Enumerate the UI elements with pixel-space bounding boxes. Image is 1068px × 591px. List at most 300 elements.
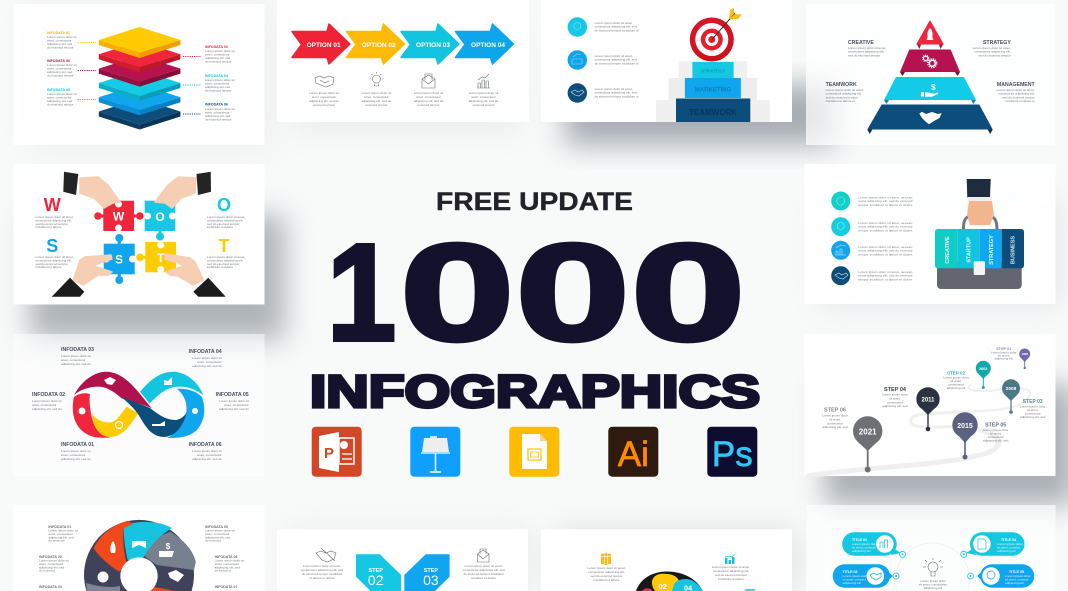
wheel labels: do eiusmod — [48, 538, 65, 542]
option captions: eiusmod tempor — [313, 103, 335, 107]
wheel labels: INFODATA 01 — [48, 525, 71, 529]
step labels: Lorem ipsum dolor — [983, 428, 1009, 432]
step labels — [822, 347, 1046, 442]
layer labels: INFODATA 06 — [205, 102, 228, 106]
wheel labels: Lorem ipsum dolor sit — [48, 528, 78, 532]
bubble title 05: TITLE 05 — [1009, 570, 1024, 574]
icon: Google Slides — [509, 427, 559, 477]
step labels: STEP 04 — [884, 387, 907, 393]
SWOT captions: Lorem ipsum dolor sit amet, — [207, 215, 245, 219]
puzzle piece S — [102, 234, 136, 284]
briefcase list text: tempor incididunt ut labore et dolore — [858, 203, 913, 207]
SWOT captions: sed do eiusmod tempor — [36, 222, 68, 226]
wheel labels: Lorem ipsum dolor sit — [205, 528, 235, 532]
icon circle: handshake — [831, 266, 850, 285]
bubble title 04: TITLE 04 — [1001, 538, 1016, 542]
layer labels: amet, consectetur — [205, 52, 230, 56]
step labels: Lorem ipsum dolor — [1020, 404, 1046, 408]
bubble title 04: adipiscing elit — [997, 549, 1016, 553]
layer labels: Lorem ipsum dolor sit — [205, 78, 235, 82]
arrow: option 04: OPTION 04 — [471, 42, 505, 49]
stairs: TEAMWORK — [689, 108, 737, 117]
icon: chart circle — [568, 50, 587, 70]
SWOT captions: sed do eiusmod tempor — [207, 222, 239, 226]
step labels: sit amet, — [889, 396, 901, 400]
connector dots — [893, 551, 974, 579]
pyramid labels: incididunt ut labore et — [1005, 99, 1035, 103]
bubble title 01: sit amet, consect — [852, 546, 875, 550]
step labels: Lorem ipsum dolor — [943, 376, 969, 380]
wheel labels: amet, consectetur — [205, 532, 230, 536]
arrow: option 04 — [456, 24, 514, 64]
stairs — [656, 61, 770, 122]
pyramid labels: STRATEGY — [983, 40, 1011, 46]
pyramid labels: Lorem ipsum dolor sit amet, — [826, 88, 864, 92]
brain captions: Lorem ipsum dolor sit amet, — [712, 565, 750, 569]
panel: SWOT puzzle — [14, 164, 264, 304]
briefcase list text: Lorem ipsum dolor sit amet, aenean — [858, 221, 913, 225]
wheel labels: amet, consectetur — [215, 562, 239, 566]
layer labels — [47, 31, 235, 122]
infinity labels: INFODATA 03 — [61, 347, 94, 353]
list text: consectetur adipiscing elit, sed — [595, 58, 637, 62]
wheel labels: adipiscing elit, sed — [48, 536, 74, 540]
pyramid labels: consectetur adipiscing elit, — [826, 92, 862, 96]
option captions: adipiscing elit, sed do — [362, 99, 391, 103]
briefcase illustration: CREATIVE — [945, 236, 951, 264]
SWOT captions: consectetur adipiscing elit, — [36, 218, 72, 222]
wheel labels: do eiusmod — [39, 568, 55, 572]
briefcase list text — [858, 196, 913, 281]
icon: lightbulb circle — [568, 17, 587, 37]
step labels: adipiscing elit, sed — [1020, 415, 1046, 419]
SWOT captions — [36, 215, 245, 269]
briefcase list text: netus adipiscing elit, sed do eiusmod — [858, 249, 913, 253]
wheel labels: INFODATA 05 — [205, 525, 228, 529]
step captions — [301, 564, 505, 580]
pyramid labels: MANAGEMENT — [997, 82, 1036, 88]
icon: Photoshop: Ps — [712, 435, 753, 474]
infinity labels: Lorem ipsum dolor sit — [61, 354, 91, 358]
list text — [595, 21, 639, 98]
briefcase illustration — [935, 179, 1024, 289]
infinity labels: adipiscing elit, sed do — [32, 407, 62, 411]
step labels: consectetur — [887, 400, 903, 404]
list text: consectetur adipiscing elit, sed — [595, 25, 637, 29]
infinity labels: amet, consectetur — [61, 453, 86, 457]
briefcase list text: tempor incididunt ut labore et dolore — [858, 228, 913, 232]
list text: do eiusmod tempor incididunt ut — [595, 28, 639, 32]
icon: Illustrator — [608, 427, 658, 477]
pyramid labels: CREATIVE — [848, 40, 874, 46]
icon: handshake circle — [568, 83, 587, 103]
bubble title 05: Lorem ipsum dolor — [1005, 574, 1031, 578]
bubble title 04: sit amet, consect — [997, 546, 1020, 550]
icon: PowerPoint — [312, 427, 362, 477]
infinity labels: amet, consectetur — [224, 403, 249, 407]
bubble title 05: sit amet, consect — [1005, 578, 1028, 582]
step labels: Lorem ipsum dolor — [991, 350, 1017, 354]
step labels: Lorem ipsum dolor — [882, 392, 908, 396]
pyramid labels: sed do eiusmod tempor — [826, 95, 858, 99]
SWOT captions: sed do eiusmod tempor — [36, 262, 68, 266]
bubble title 05: adipiscing elit — [1005, 581, 1024, 585]
infinity labels: adipiscing elit, sed do — [192, 457, 222, 461]
panel: title bubbles — [806, 505, 1056, 591]
briefcase list text: tempor incididunt ut labore et dolore — [858, 252, 913, 256]
infinity labels: INFODATA 05 — [216, 392, 249, 398]
pyramid level: handshake — [867, 104, 993, 134]
briefcase list text: netus adipiscing elit, sed do eiusmod — [858, 225, 913, 229]
step labels: STEP 01 — [996, 347, 1011, 351]
wheel chart: $ — [166, 542, 171, 551]
letter W: W — [44, 195, 61, 215]
arrow: option 01: OPTION 01 — [307, 42, 341, 49]
wheel labels: INFODATA 02 — [39, 555, 62, 559]
wheel labels: adipiscing elit, sed — [205, 536, 231, 540]
option captions: Lorem ipsum dolor sit — [362, 91, 391, 95]
puzzle piece T — [136, 242, 176, 273]
layer labels: INFODATA 05 — [47, 88, 70, 92]
layer labels: amet, consectetur — [205, 110, 230, 114]
pyramid level: rocket — [916, 20, 944, 49]
layer labels: INFODATA 04 — [205, 74, 228, 78]
briefcase list text: tempor incididunt ut labore et dolore — [858, 277, 913, 281]
step captions: ut labore et dolore — [310, 576, 335, 580]
pin 2021: 2021 — [859, 428, 877, 436]
icon: Illustrator: Ai — [618, 435, 649, 474]
layer labels: adipiscing elit, sed — [47, 42, 73, 46]
SWOT captions: consectetur adipiscing elit, — [207, 258, 243, 262]
option captions: amet, consectetur — [416, 95, 441, 99]
bubble title 02: Lorem ipsum dolor — [842, 574, 868, 578]
icon: envelope — [478, 549, 489, 562]
option captions: amet, consectetur — [312, 95, 336, 99]
layer labels: do eiusmod tempor — [47, 74, 73, 78]
icon: chart — [725, 554, 735, 564]
infinity labels: adipiscing elit, sed do — [61, 457, 91, 461]
step captions: consectetur adipiscing elit, sed — [463, 568, 505, 572]
step labels: adipiscing elit — [947, 386, 965, 390]
step labels: STEP 03 — [1023, 399, 1043, 405]
bubble title 02: adipiscing elit — [842, 581, 861, 585]
bubble title 02: TITLE 02 — [842, 570, 857, 574]
SWOT captions: Lorem ipsum dolor sit amet, — [36, 255, 74, 259]
hand top right — [155, 172, 211, 208]
central text: Lorem ipsum dolor — [920, 579, 946, 583]
icon: target with arrow — [690, 8, 742, 62]
step labels: STEP 02 — [947, 370, 965, 376]
pin 2002: 2002 — [979, 367, 988, 371]
pin 2015 — [952, 412, 978, 460]
bubble title 02: sit amet, consect — [842, 578, 866, 582]
pin 1998 — [1019, 348, 1030, 369]
layer labels: Lorem ipsum dolor sit — [47, 92, 77, 96]
bubble title 04 — [966, 532, 1024, 556]
pyramid labels — [826, 40, 1036, 103]
brain chart: 02 — [659, 582, 667, 591]
pyramid labels: Lorem ipsum dolor sit amet, — [973, 46, 1011, 50]
step 03 tile: STEP — [424, 568, 438, 574]
arrow: option 03: OPTION 03 — [416, 42, 450, 49]
option captions: amet, consectetur — [364, 95, 389, 99]
icon: chart — [477, 74, 490, 88]
pin 2008 — [1002, 379, 1020, 414]
pyramid labels: consectetur adipiscing elit, — [975, 50, 1011, 54]
step labels: sit amet, — [998, 354, 1010, 358]
brain captions: sed do eiusmod tempor — [590, 574, 623, 578]
SWOT captions: incididunt ut labore — [36, 265, 62, 269]
central text: adipiscing elit — [924, 586, 942, 590]
briefcase illustration: BUSINESS — [1010, 236, 1016, 264]
pyramid labels: Lorem ipsum dolor sit amet, — [997, 88, 1035, 92]
step 02 tile: STEP — [369, 568, 383, 574]
pyramid labels: sed do eiusmod tempor — [848, 53, 880, 57]
road — [808, 385, 1030, 476]
option captions: Lorem ipsum dolor sit — [309, 91, 339, 95]
option captions: adipiscing elit, sed do — [414, 99, 444, 103]
infinity labels — [32, 347, 249, 461]
pyramid labels: sed do eiusmod tempor — [978, 53, 1011, 57]
letter O: O — [217, 195, 231, 215]
brain captions: incididunt ut labore — [594, 578, 620, 582]
pyramid labels: consectetur adipiscing elit, — [848, 50, 884, 54]
wheel labels: Lorem ipsum dolor sit — [215, 558, 244, 562]
layer labels: amet, consectetur — [47, 66, 72, 70]
SWOT captions: Lorem ipsum dolor sit amet, — [207, 255, 245, 259]
letter T: T — [218, 236, 230, 256]
layer labels: adipiscing elit, sed — [205, 85, 231, 89]
pyramid labels: TEAMWORK — [826, 82, 857, 88]
infinity labels: INFODATA 02 — [32, 392, 65, 398]
SWOT captions: incididunt ut labore — [36, 225, 62, 229]
layer labels: do eiusmod tempor — [205, 118, 231, 122]
layer labels: do eiusmod tempor — [205, 60, 231, 64]
step captions: do eiusmod tempor incididunt — [302, 572, 342, 576]
pin 2011: 2011 — [921, 398, 935, 404]
layer labels: INFODATA 02 — [205, 45, 228, 49]
wheel labels: Lorem ipsum dolor sit — [39, 558, 69, 562]
arrow: option 03 — [401, 24, 459, 64]
wheel labels: adipiscing elit, sed — [39, 566, 65, 570]
SWOT captions: sed do eiusmod tempor — [207, 262, 239, 266]
hand top left — [63, 172, 120, 208]
list text: do eiusmod tempor incididunt ut — [595, 61, 639, 65]
icon: lightbulb — [370, 72, 383, 86]
puzzle piece W — [94, 199, 144, 232]
hand bottom right — [165, 254, 226, 297]
infinity labels: amet, consectetur — [197, 453, 222, 457]
step labels: consectetur — [948, 382, 964, 386]
layer labels: amet, consectetur — [47, 96, 72, 100]
icon circle: head — [831, 192, 850, 210]
step labels: adipiscing elit, sed — [882, 404, 908, 408]
bubble title 01: adipiscing elit — [852, 549, 871, 553]
bubble title 04: Lorem ipsum dolor — [997, 542, 1023, 546]
puzzle piece T: T — [157, 251, 165, 265]
bubble title 01: TITLE 01 — [852, 538, 867, 542]
panel: option arrows — [277, 0, 529, 122]
list text: Lorem ipsum dolor sit amet, — [595, 87, 633, 91]
panel: pyramid — [806, 4, 1055, 145]
panel: target and stairs — [541, 0, 792, 122]
step captions: ut labore et dolore — [471, 576, 496, 580]
stairs: STRATEGY — [701, 68, 725, 74]
panel: stacked layers — [14, 4, 264, 145]
layer labels: INFODATA 01 — [47, 31, 70, 35]
briefcase list text: Lorem ipsum dolor sit amet, aenean — [858, 270, 913, 274]
hand bottom left — [52, 255, 112, 297]
wheel labels — [39, 525, 244, 589]
layer labels: INFODATA 03 — [47, 59, 70, 63]
layer labels: adipiscing elit, sed — [47, 99, 73, 103]
step labels: sit amet, — [829, 418, 841, 422]
step labels: consectetur — [988, 435, 1004, 439]
layer labels: Lorem ipsum dolor sit — [47, 63, 77, 67]
brain captions: sed do eiusmod tempor — [715, 573, 747, 577]
layer labels: Lorem ipsum dolor sit — [47, 35, 77, 39]
wheel labels: amet, consectetur — [48, 532, 73, 536]
puzzle piece O — [144, 201, 176, 240]
list text: Lorem ipsum dolor sit amet, — [595, 54, 633, 58]
icon circle: bulb — [831, 217, 850, 236]
pyramid labels: sed do eiusmod tempor — [1002, 95, 1035, 99]
step labels: adipiscing elit, sed — [822, 425, 848, 429]
infinity labels: adipiscing elit, sed do — [192, 364, 222, 368]
SWOT captions: Lorem ipsum dolor sit amet, — [36, 215, 74, 219]
step labels: consectetur — [827, 422, 843, 426]
icon: central lightbulb — [923, 558, 943, 576]
wheel labels: INFODATA 06 — [215, 555, 238, 559]
heading: 1000: 1 — [327, 215, 396, 369]
step captions: Lorem ipsum dolor sit amet, — [465, 564, 503, 568]
briefcase list text: Lorem ipsum dolor sit amet, aenean — [858, 196, 913, 200]
central text: sit amet, consectetur — [919, 582, 947, 586]
step labels: adipiscing elit, sed — [983, 438, 1009, 442]
infinity labels: INFODATA 06 — [189, 442, 222, 448]
pyramid labels: incididunt ut labore et — [826, 99, 855, 103]
icon: handshake — [315, 76, 334, 87]
layer labels: adipiscing elit, sed — [47, 70, 73, 74]
wheel labels: INFODATA 03 — [39, 585, 62, 589]
layer labels: do eiusmod tempor — [47, 46, 73, 50]
pyramid level: hand with dollar: $ — [931, 83, 936, 92]
layered stack chart — [99, 27, 180, 130]
option captions: adipiscing elit, sed do — [469, 99, 499, 103]
brain captions: consectetur adipiscing elit, — [713, 569, 749, 573]
wheel labels: INFODATA 07 — [215, 585, 238, 589]
infinity labels: adipiscing elit, sed do — [61, 362, 91, 366]
heading: 1000: 000 — [400, 215, 745, 370]
central text — [919, 579, 947, 590]
step labels: consectetur — [1025, 412, 1041, 416]
step captions: consectetur adipiscing elit, sed — [301, 568, 343, 572]
layer labels: amet, consectetur — [205, 82, 230, 86]
step 02 tile: 02 — [368, 572, 384, 588]
icon: PowerPoint: P — [324, 445, 334, 462]
brain captions: Lorem ipsum dolor sit amet, — [587, 566, 626, 570]
option captions: eiusmod tempor — [365, 103, 387, 107]
infinity labels: Lorem ipsum dolor sit — [219, 399, 249, 403]
layer labels: adipiscing elit, sed — [205, 56, 231, 60]
pyramid labels: consectetur adipiscing elit, — [998, 92, 1035, 96]
wheel labels: do eiusmod — [215, 568, 231, 572]
step 03 tile: 03 — [423, 572, 439, 588]
list text: consectetur adipiscing elit, sed — [595, 91, 637, 95]
list text: do eiusmod tempor incididunt ut — [595, 94, 639, 98]
option captions: Lorem ipsum dolor sit — [469, 91, 499, 95]
wheel chart — [84, 520, 196, 591]
pin 2021 — [853, 416, 882, 472]
pyramid labels: Lorem ipsum dolor sit amet, — [848, 46, 886, 50]
step labels: STEP 05 — [985, 422, 1006, 428]
icon: Keynote — [410, 427, 460, 477]
brain chart — [636, 572, 703, 591]
pyramid level: gears — [900, 50, 960, 76]
panel: briefcase — [804, 164, 1056, 304]
icon: envelope — [422, 74, 435, 88]
bubble title 02 — [833, 564, 893, 588]
layer labels: do eiusmod tempor — [47, 102, 73, 106]
heading: free update: FREE UPDATE — [436, 188, 633, 216]
step labels: adipiscing elit — [994, 356, 1013, 360]
infinity labels: amet, consectetur — [32, 403, 57, 407]
list text: Lorem ipsum dolor sit amet, — [595, 21, 633, 25]
panel: steps — [277, 529, 528, 591]
infinity segments — [73, 372, 204, 438]
option captions: amet, consectetur — [471, 95, 496, 99]
briefcase list text: netus adipiscing elit, sed do eiusmod — [858, 199, 913, 203]
infinity labels: INFODATA 01 — [61, 442, 94, 448]
arrow: option 02 — [346, 24, 404, 64]
icon: people — [601, 553, 611, 565]
pin 2015: 2015 — [957, 423, 973, 430]
step 02 tile — [356, 554, 401, 591]
puzzle piece O: O — [155, 210, 165, 224]
step labels: sit amet, — [990, 432, 1002, 436]
infinity labels: Lorem ipsum dolor sit — [32, 399, 62, 403]
bubble title 05 — [977, 564, 1034, 588]
step labels: Lorem ipsum dolor — [822, 414, 848, 418]
brain captions: incididunt ut labore — [718, 577, 744, 581]
infinity labels: amet, consectetur — [61, 358, 86, 362]
puzzle piece S: S — [115, 252, 123, 266]
SWOT captions: incididunt ut labore — [207, 265, 233, 269]
infinity labels: Lorem ipsum dolor sit — [192, 356, 222, 360]
arrow: option 01 — [292, 24, 350, 64]
wheel labels: amet, consectetur — [39, 562, 64, 566]
layer labels: amet, consectetur — [47, 38, 72, 42]
briefcase illustration: STARTUP — [966, 237, 972, 263]
SWOT captions: consectetur adipiscing elit, — [36, 258, 72, 262]
panel: infinity loop — [14, 334, 264, 476]
option captions: adipiscing elit, sed do — [309, 99, 339, 103]
icon: handshake — [316, 548, 336, 562]
icon circle: chart — [831, 241, 850, 260]
arrow: option 02: OPTION 02 — [362, 42, 396, 49]
pin 2002 — [976, 361, 991, 389]
panel: wheel — [14, 505, 264, 591]
layer labels: Lorem ipsum dolor sit — [205, 49, 235, 53]
briefcase list text: netus adipiscing elit, sed do eiusmod — [858, 274, 913, 278]
brain captions: consectetur adipiscing elit, — [588, 570, 625, 574]
panel: brain — [541, 529, 792, 591]
option captions: Lorem ipsum dolor sit — [414, 91, 443, 95]
step 03 tile — [404, 554, 450, 591]
infinity labels: INFODATA 04 — [189, 349, 222, 355]
layer labels: adipiscing elit, sed — [205, 114, 231, 118]
pyramid level: hand with dollar — [884, 77, 976, 104]
